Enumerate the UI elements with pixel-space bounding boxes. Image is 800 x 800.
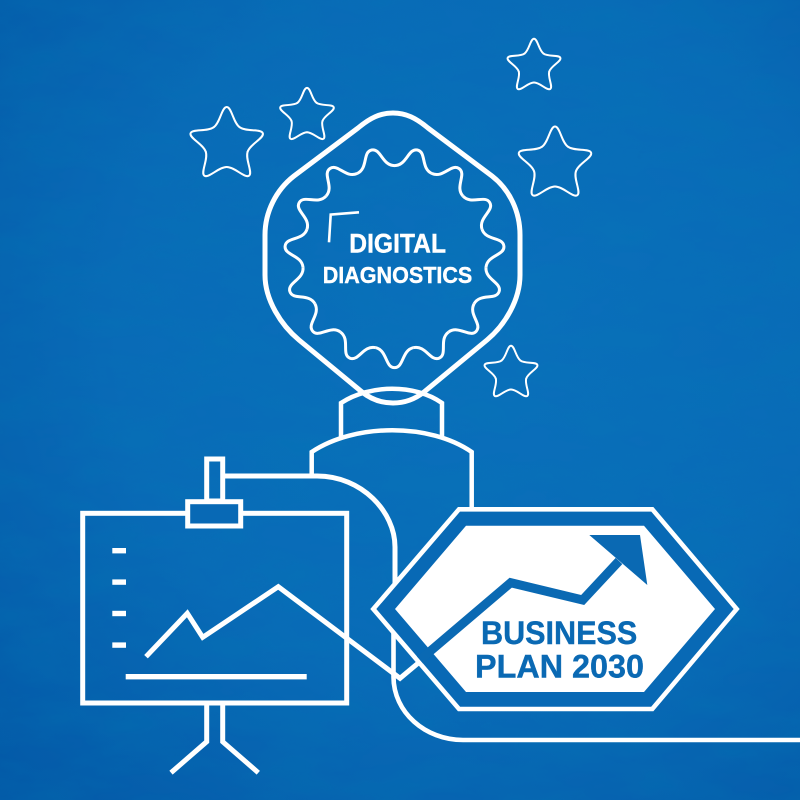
axis tick marks [112,548,126,648]
business plan hexagon badge [373,509,737,709]
chart baseline [126,674,307,679]
body dome [312,430,472,510]
neck cap [341,389,442,437]
title: digital diagnostics: DIAGNOSTICS [323,262,472,288]
hexagon white panel [395,526,715,692]
star: right [515,126,595,203]
mount clamp [188,502,241,526]
upper connecting pipe [224,476,395,590]
decorative stars [187,39,595,401]
mount post [207,459,223,501]
microscope neck and body [312,389,472,510]
title: digital diagnostics: DIGITAL [349,229,446,259]
title: digital diagnostics [323,229,472,288]
wavy badge outline [283,146,506,368]
corner tick mark [329,212,359,242]
badge text: PLAN 2030 [475,649,644,685]
lower connecting pipe [394,625,800,740]
octagon lens outline [265,113,520,403]
star: upper left [277,88,337,144]
tripod legs [171,705,258,773]
presentation board [83,459,418,773]
badge text: BUSINESS [481,615,637,651]
rising arrow [420,535,647,660]
star: top right [505,39,563,94]
board frame [83,513,347,703]
line chart trend [146,587,418,678]
star: far left [187,107,267,183]
star: lower right [482,346,540,401]
hexagon outer outline [373,509,737,709]
badge text [475,615,644,685]
